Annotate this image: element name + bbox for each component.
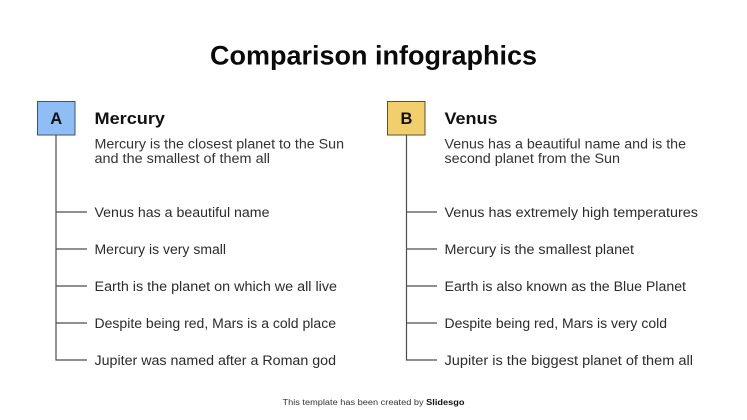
- list item B3: Earth is also known as the Blue Planet: [444, 279, 686, 294]
- list item B1: Venus has extremely high temperatures: [444, 205, 698, 220]
- title: Comparison infographics: [210, 40, 537, 70]
- list item A4: Despite being red, Mars is a cold place: [94, 316, 336, 331]
- heading: Venus: Venus: [444, 109, 498, 128]
- badge B: B: [401, 110, 413, 128]
- heading: Mercury: Mercury: [94, 109, 166, 128]
- list item A1: Venus has a beautiful name: [94, 205, 270, 220]
- tree connector A: [56, 135, 87, 360]
- description: Mercury: Mercury is the closest planet to the Sun: [94, 136, 344, 151]
- list item B4: Despite being red, Mars is very cold: [444, 316, 667, 331]
- panel: Mercury: [38, 102, 348, 368]
- list item A2: Mercury is very small: [94, 242, 226, 257]
- list item B5: Jupiter is the biggest planet of them all: [444, 353, 693, 368]
- list item A3: Earth is the planet on which we all live: [94, 279, 337, 294]
- description: Venus: Venus has a beautiful name and is the: [444, 136, 686, 151]
- description: Mercury: and the smallest of them all: [94, 151, 270, 166]
- list item A5: Jupiter was named after a Roman god: [94, 353, 336, 368]
- description: Venus: second planet from the Sun: [444, 151, 620, 166]
- panel: Venus: [388, 102, 698, 368]
- footer credit: This template has been created by Slidesgo: [282, 398, 465, 407]
- badge B: [388, 102, 425, 135]
- badge A: [38, 102, 75, 135]
- tree connector B: [406, 135, 437, 360]
- badge A: A: [50, 110, 62, 128]
- list item B2: Mercury is the smallest planet: [444, 242, 634, 257]
